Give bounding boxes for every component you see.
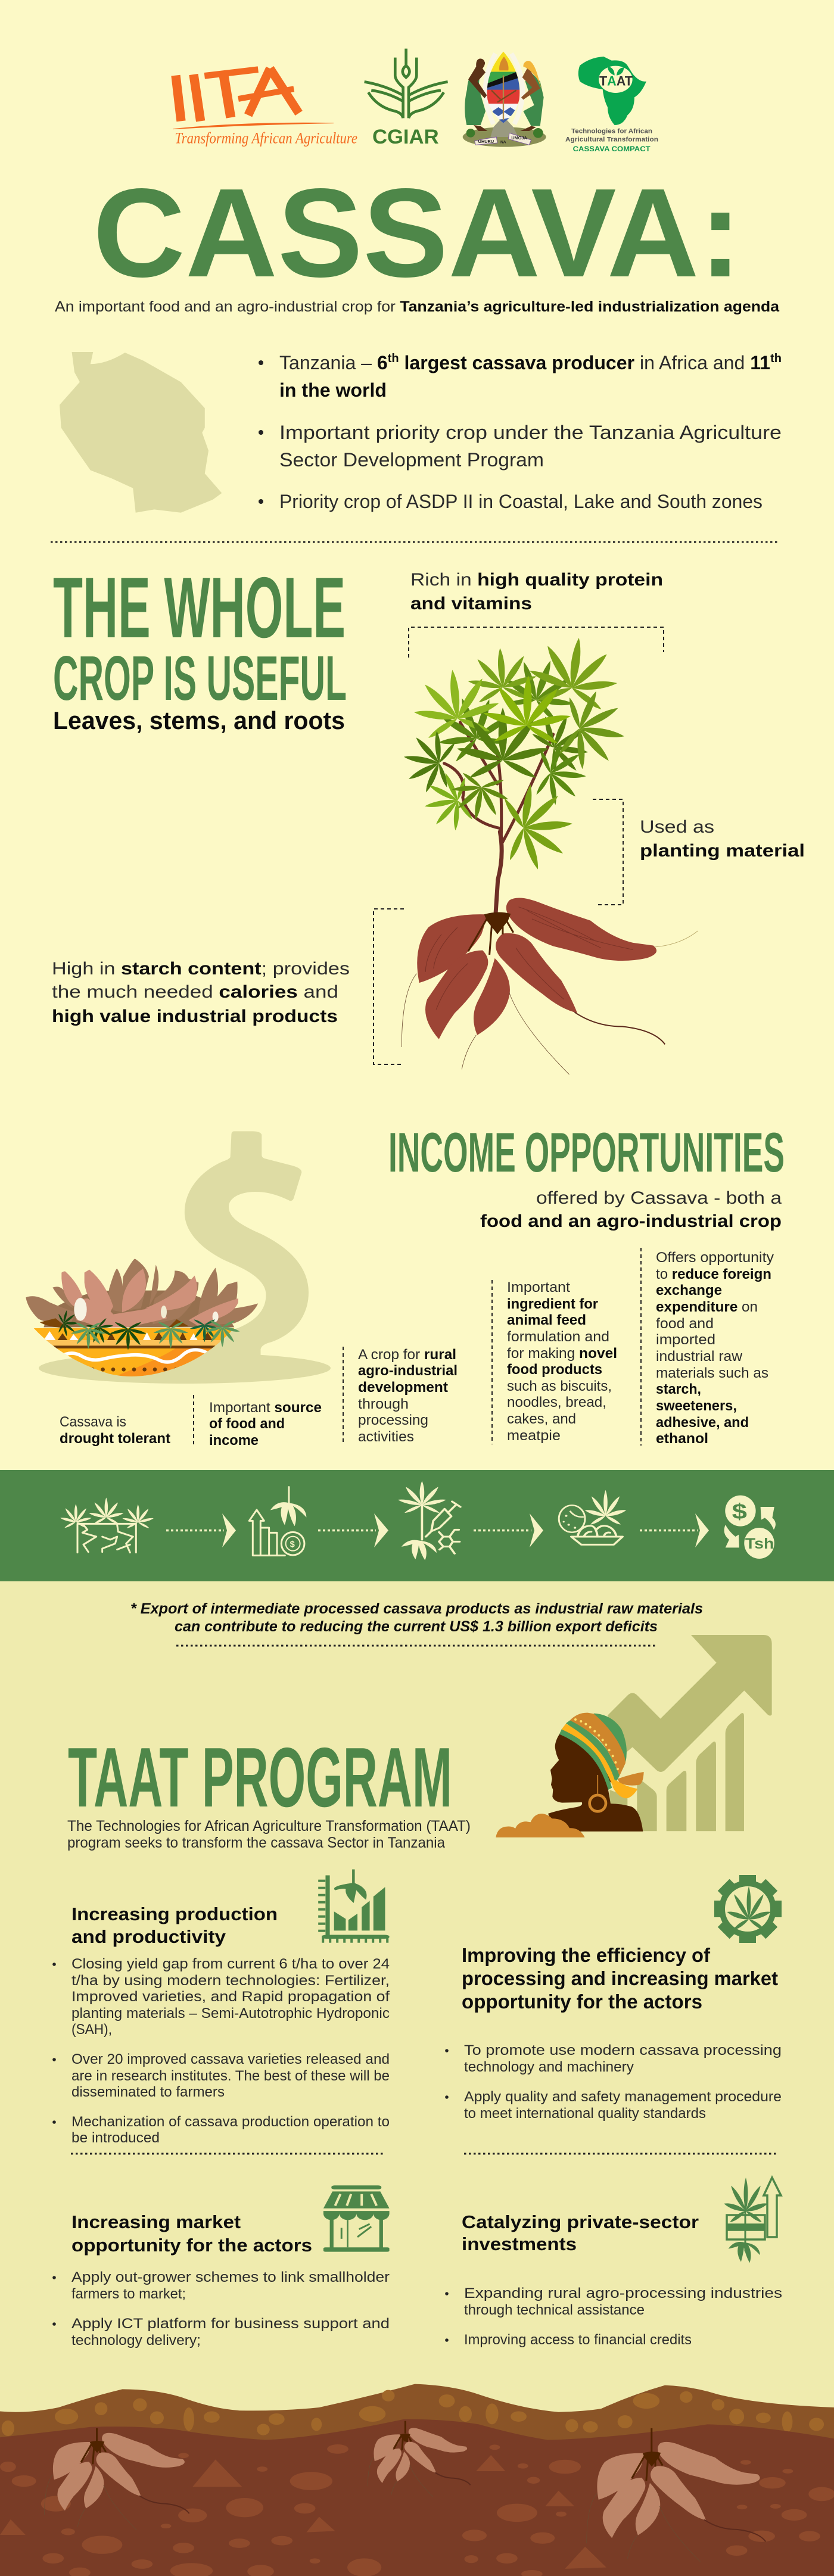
icon: market stall: [323, 2185, 390, 2252]
column 2: food and income: of food and: [209, 1416, 285, 1432]
earring: [590, 1775, 606, 1811]
callout: roots: High in starch content ; provides: [52, 959, 350, 979]
export note: [130, 1600, 703, 1646]
key facts list: [259, 352, 782, 512]
green value-chain band: [0, 1470, 834, 1581]
icon: currency exchange: Tsh: [745, 1535, 774, 1552]
illustration: cassava plant: [399, 631, 698, 1074]
logo: IITA: [173, 68, 357, 147]
panel: catalyzing investments: [445, 2178, 782, 2348]
heading: TAAT program: TAAT PROGRAM: [68, 1730, 452, 1825]
heading: [71, 1904, 278, 1947]
callout: roots: [52, 909, 404, 1064]
bullet list: Expanding rural agro-processing industries: [464, 2285, 782, 2301]
subtitle: An important food and an agro-industrial crop for Tanzania’s agriculture-led industrialization agenda: [55, 298, 780, 315]
column 1: drought tolerant: drought tolerant: [60, 1431, 170, 1447]
column 4: animal feed and novel food: ingredient for: [507, 1296, 598, 1312]
heading: and productivity: [71, 1926, 226, 1947]
column 4: animal feed and novel food: meatpie: [507, 1428, 561, 1444]
column 5: foreign exchange: starch,: [656, 1381, 701, 1397]
column 4: animal feed and novel food: cakes, and: [507, 1411, 576, 1427]
column 3: agro-industrial development: processing: [358, 1412, 428, 1428]
heading: the whole crop is useful: Leaves, stems, and roots: [53, 706, 345, 734]
panel: increasing production: [52, 1870, 390, 2146]
callout: stems: Used as: [640, 817, 714, 837]
cloud: [496, 1814, 585, 1837]
column 3: agro-industrial development: [358, 1347, 458, 1445]
bullet list: t/ha by using modern technologies: Fertilizer,: [71, 1973, 390, 1989]
bullet list: [52, 2269, 390, 2348]
icon: dollar sign with shadow: [39, 1131, 331, 1384]
column 3: agro-industrial development: agro-industrial: [358, 1363, 458, 1379]
logo: TAAT: CASSAVA COMPACT: [573, 145, 651, 153]
column 5: foreign exchange: materials such as: [656, 1365, 768, 1381]
column 2: food and income: [209, 1400, 322, 1449]
title: CASSAVA:: [93, 162, 742, 303]
key facts list: in Africa and 11: [640, 352, 770, 373]
callout: stems: [593, 799, 805, 905]
heading: the whole crop is useful: [53, 559, 347, 734]
icon: food products: [559, 1490, 627, 1544]
key facts list: Important priority crop under the Tanzania Agriculture: [279, 422, 782, 443]
bullet list: [445, 2042, 782, 2122]
export note: can contribute to reducing the current US$ 1.3 billion export deficits: [175, 1618, 658, 1635]
logo: TAAT: Agricultural Transformation: [565, 136, 658, 144]
callout: leaves: Rich in high quality protein: [410, 570, 663, 590]
heading: TAAT program: program seeks to transform the cassava Sector in Tanzania: [67, 1834, 445, 1851]
callout: leaves: and vitamins: [410, 594, 532, 613]
bars: [609, 1713, 744, 1831]
key facts list: th: [770, 352, 782, 365]
logo: TAAT: [565, 57, 658, 153]
logo: IITA: Transforming African Agriculture: [175, 130, 357, 147]
column 5: foreign exchange: [656, 1250, 774, 1447]
bullet list: Mechanization of cassava production operation to: [71, 2114, 390, 2130]
column 4: animal feed and novel food: Important: [507, 1279, 570, 1295]
callout: stems: planting material: [640, 841, 805, 861]
heading: income opportunities: food and an agro-industrial crop: [480, 1211, 782, 1231]
heading: Increasing production: [71, 1904, 278, 1924]
bullet list: Closing yield gap from current 6 t/ha to over 24: [71, 1956, 390, 1972]
arrow: [640, 1513, 709, 1547]
bullet list: through technical assistance: [464, 2302, 645, 2318]
column 4: animal feed and novel food: animal feed: [507, 1312, 586, 1328]
bullet list: Apply ICT platform for business support and: [71, 2316, 390, 2332]
bullet list: planting materials – Semi-Autotrophic Hydroponic: [71, 2005, 390, 2021]
heading: the whole crop is useful: THE WHOLE: [53, 559, 346, 656]
bullet list: to meet international quality standards: [464, 2105, 706, 2122]
heading: opportunity for the actors: [71, 2235, 312, 2256]
column 1: drought tolerant: [60, 1414, 170, 1447]
headwrap: [559, 1713, 644, 1798]
cassava roots underground: [45, 2428, 765, 2562]
column 4: animal feed and novel food: for making novel: [507, 1345, 617, 1362]
column 3: agro-industrial development: activities: [358, 1429, 414, 1445]
column 5: foreign exchange: industrial raw: [656, 1348, 743, 1365]
column 3: agro-industrial development: development: [358, 1379, 448, 1396]
heading: processing and increasing market: [462, 1967, 778, 1989]
heading: Improving the efficiency of: [462, 1944, 711, 1966]
callout: leaves: [409, 570, 664, 658]
bullet list: To promote use modern cassava processing: [464, 2042, 782, 2058]
heading: [462, 1944, 778, 2013]
woman silhouette: [548, 1734, 643, 1831]
bullet list: farmers to market;: [71, 2286, 186, 2302]
column 5: foreign exchange: adhesive, and: [656, 1415, 749, 1431]
heading: opportunity for the actors: [462, 1991, 702, 2013]
heading: TAAT program: The Technologies for African Agriculture Transformation (TAAT): [67, 1818, 471, 1834]
icon: drought-cracked soil: [60, 1497, 154, 1553]
logo: CGIAR: CGIAR: [372, 126, 439, 148]
bullet list: disseminated to farmers: [71, 2084, 225, 2100]
key facts list: in the world: [279, 379, 387, 401]
key facts list: Priority crop of ASDP II in Coastal, Lake and South zones: [279, 491, 763, 512]
heading: [71, 2211, 312, 2256]
logo: Tanzania coat of arms: UMOJA: [511, 135, 527, 141]
column 5: foreign exchange: food and: [656, 1316, 714, 1332]
column 4: animal feed and novel food: formulation and: [507, 1329, 609, 1345]
illustration: bowl of cassava: [24, 1259, 258, 1382]
logo: Tanzania coat of arms: UHURU: [478, 139, 494, 144]
heading: Catalyzing private-sector: [462, 2211, 699, 2232]
bullet list: technology and machinery: [464, 2059, 634, 2075]
column 4: animal feed and novel food: [507, 1279, 617, 1444]
bullet list: Apply out-grower schemes to link smallholder: [71, 2269, 390, 2285]
heading: Increasing market: [71, 2211, 241, 2232]
callout: roots: the much needed calories and: [52, 982, 338, 1002]
column 3: agro-industrial development: through: [358, 1396, 409, 1412]
bullet list: Improved varieties, and Rapid propagation of: [71, 1989, 390, 2005]
callout: roots: high value industrial products: [52, 1007, 338, 1026]
map of Tanzania: [60, 352, 222, 513]
icon: gear with leaf: [714, 1875, 782, 1943]
column 3: agro-industrial development: A crop for rural: [358, 1347, 456, 1363]
arrow: [474, 1513, 543, 1547]
key facts list: Tanzania – 6: [279, 352, 388, 373]
key facts list: Sector Development Program: [279, 449, 544, 471]
heading: the whole crop is useful: CROP IS USEFUL: [53, 643, 347, 714]
column 5: foreign exchange: Offers opportunity: [656, 1250, 774, 1266]
logo: CGIAR: [365, 49, 448, 148]
column 4: animal feed and novel food: food products: [507, 1362, 602, 1378]
icon: yield and income chart: [249, 1487, 306, 1556]
column 5: foreign exchange: imported: [656, 1332, 715, 1348]
bullet list: Improving access to financial credits: [464, 2332, 692, 2348]
column 5: foreign exchange: ethanol: [656, 1431, 708, 1447]
icon: investment growth: [724, 2178, 781, 2263]
bullet list: Over 20 improved cassava varieties released and: [71, 2051, 390, 2067]
bullet list: [445, 2285, 782, 2348]
arrow: [166, 1513, 236, 1547]
icon: processing plant, syringe and molecule: [397, 1481, 460, 1560]
heading: income opportunities: offered by Cassava - both a: [536, 1188, 782, 1208]
growth arrow: [608, 1635, 772, 1772]
column 5: foreign exchange: sweeteners,: [656, 1398, 737, 1414]
column 2: food and income: Important source: [209, 1400, 322, 1416]
bullet list: (SAH),: [71, 2021, 112, 2038]
logo: TAAT: Technologies for African: [571, 127, 652, 135]
heading: [462, 2211, 699, 2254]
heading: TAAT program: [67, 1730, 471, 1851]
column 5: foreign exchange: exchange: [656, 1282, 722, 1298]
export note: * Export of intermediate processed cassava products as industrial raw materials: [130, 1600, 703, 1617]
logo: Tanzania coat of arms: [463, 51, 546, 147]
icon: production chart: [322, 1870, 390, 1939]
column 5: foreign exchange: to reduce foreign: [656, 1266, 771, 1282]
bullet list: technology delivery;: [71, 2332, 201, 2348]
column 5: foreign exchange: expenditure on: [656, 1299, 758, 1315]
icon: currency exchange: [724, 1496, 776, 1559]
bullet list: Apply quality and safety management procedure: [464, 2089, 782, 2105]
soil illustration: [0, 2384, 834, 2576]
logo: Tanzania coat of arms: NA: [500, 141, 506, 145]
column 4: animal feed and novel food: such as biscuits,: [507, 1378, 612, 1394]
bullet list: [52, 1956, 390, 2146]
icon: currency exchange: $: [732, 1500, 747, 1524]
key facts list: largest cassava producer: [399, 352, 634, 373]
panel: improving efficiency: [445, 1875, 782, 2122]
key facts list: th: [388, 352, 399, 365]
arrow: [318, 1513, 388, 1547]
illustration: growth arrow and woman: [496, 1635, 772, 1837]
column 1: drought tolerant: Cassava is: [60, 1414, 126, 1430]
logo: TAAT: TAAT: [599, 73, 633, 88]
icon: yield and income chart: $: [290, 1540, 295, 1550]
bullet list: are in research institutes. The best of these will be: [71, 2068, 390, 2084]
heading: investments: [462, 2234, 577, 2254]
column 4: animal feed and novel food: noodles, bread,: [507, 1394, 606, 1410]
panel: increasing market opportunity: [52, 2185, 390, 2348]
bullet list: be introduced: [71, 2130, 160, 2146]
heading: income opportunities: [388, 1121, 785, 1231]
column 2: food and income: income: [209, 1432, 259, 1449]
